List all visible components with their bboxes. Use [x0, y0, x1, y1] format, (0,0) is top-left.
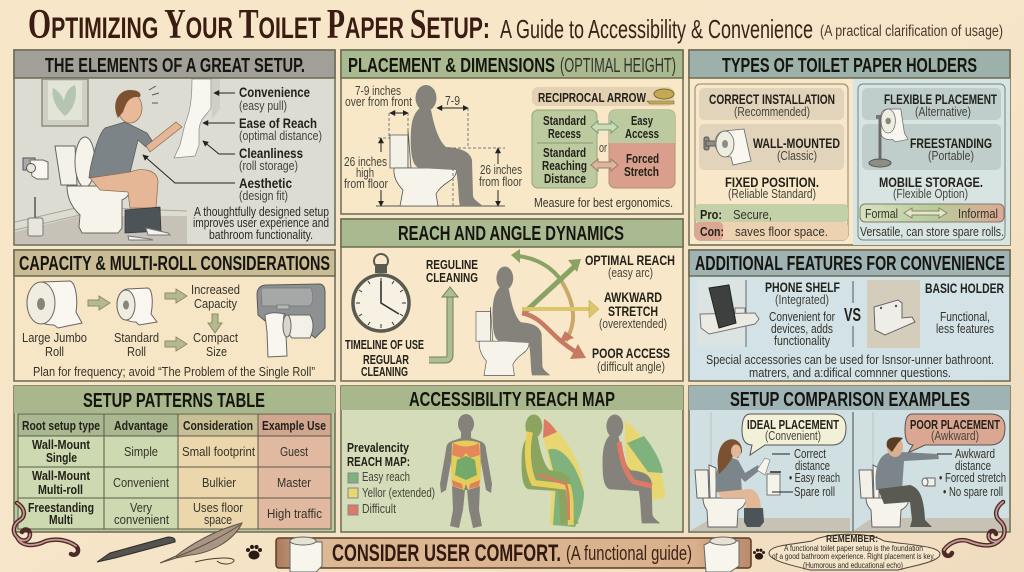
card: freestanding: MOBILE STORAGE. — [879, 174, 983, 190]
example: poor placement: Awkward — [955, 446, 995, 461]
table: Multi — [49, 512, 73, 527]
panel: setup patterns table — [14, 386, 335, 532]
labels: roll types: Capacity — [194, 296, 237, 311]
callout labels: (optimal distance) — [239, 129, 322, 143]
icon: paw right — [753, 549, 765, 560]
icon: stopwatch — [353, 254, 409, 331]
panel: reach and angle dynamics — [341, 219, 683, 381]
callout: remember cloud: REMEMBER: — [826, 533, 878, 545]
table: Wall-Mount — [32, 437, 91, 452]
callout: remember cloud: (Humorous and educational echo) — [803, 560, 903, 570]
figure: side heat map easy reach — [522, 414, 584, 527]
labels: roll types: Size — [206, 344, 227, 359]
text block: summary — [193, 205, 329, 242]
arrow: regular cleaning: REGULINE — [426, 257, 478, 272]
diagram: seated figure with dimensions — [344, 84, 522, 206]
callout labels — [239, 84, 322, 203]
title: A Guide to Accessibility & Convenience — [500, 14, 813, 44]
callout: reciprocal arrow: RECIPROCAL ARROW — [538, 90, 647, 105]
heading: reach: REACH AND ANGLE DYNAMICS — [398, 223, 624, 245]
callout: remember cloud: A functional toilet paper setup is the foundation — [784, 543, 923, 553]
card: wall-mounted: CORRECT INSTALLATION — [709, 91, 835, 107]
callout: reciprocal arrow: Reaching — [542, 158, 587, 173]
heading: capacity: CAPACITY & MULTI-ROLL CONSIDERATIONS — [19, 253, 330, 275]
panel: types of toilet paper holders — [689, 50, 1010, 245]
text block: summary: A thoughtfully designed setup — [194, 205, 329, 219]
card: wall-mounted: (Reliable Standard) — [728, 187, 816, 201]
card: wall-mounted: saves floor space. — [735, 224, 828, 239]
heading: placement: (OPTIMAL HEIGHT) — [560, 55, 676, 77]
icon: paw left — [246, 545, 262, 560]
figure: front heat map — [440, 414, 492, 528]
legend: REACH MAP: — [347, 454, 410, 469]
callout: reciprocal arrow: Forced — [626, 151, 659, 166]
icon: roll right — [704, 537, 739, 572]
legend: Yellor (extended) — [362, 486, 435, 500]
callout labels: Convenience — [239, 84, 310, 100]
table: Example Use — [262, 418, 326, 433]
card: wall-mounted: FIXED POSITION. — [725, 174, 819, 190]
diagram: seated figure with dimensions: 7-9 — [445, 94, 460, 108]
text block: special accessories — [706, 352, 994, 380]
legend — [347, 440, 435, 516]
example: ideal placement: • Easy reach — [789, 470, 840, 485]
example: ideal placement: (Convenient) — [765, 429, 821, 443]
text block: summary: improves user experience and — [193, 216, 329, 230]
labels: roll types: Compact — [193, 330, 238, 345]
table: Simple — [124, 444, 158, 459]
diagram: seated figure with dimensions: 7-9 inches — [355, 84, 401, 98]
panel: the elements of a great setup — [14, 50, 335, 245]
table: Advantage — [114, 418, 168, 433]
card: wall-mounted: Con: — [700, 224, 724, 239]
labels: reach types: POOR ACCESS — [592, 345, 670, 361]
figure: side heat map limited reach — [603, 414, 665, 523]
table: Uses floor — [193, 500, 244, 515]
table: Master — [277, 475, 312, 490]
example: ideal placement: distance — [795, 458, 830, 473]
panel: placement and dimensions — [341, 50, 683, 214]
banner: consider user comfort — [276, 537, 751, 572]
callout: reciprocal arrow: Stretch — [624, 164, 659, 179]
text block: basic holder: less features — [936, 321, 994, 336]
table: Single — [46, 450, 77, 465]
diagram: seated figure with dimensions: 26 inches — [480, 163, 522, 177]
text block: timeline: TIMELINE OF USE — [345, 337, 424, 352]
table: Bulkier — [202, 475, 237, 490]
table: space — [204, 512, 232, 527]
labels: roll types: Increased — [191, 282, 240, 297]
table — [18, 414, 331, 529]
illustration: man on toilet — [15, 79, 220, 244]
card: freestanding: FREESTANDING — [910, 135, 992, 151]
text block: timeline — [345, 337, 424, 379]
text block: phone shelf: (Integrated) — [775, 293, 829, 307]
diagram: seated figure with dimensions: 26 inches — [344, 155, 387, 169]
heading: table: SETUP PATTERNS TABLE — [83, 390, 265, 412]
card: freestanding: (Flexible Option) — [893, 187, 968, 201]
callout labels: Cleanliness — [239, 145, 303, 161]
text block: phone shelf: Convenient for — [769, 309, 836, 324]
title: OPTIMIZING YOUR TOILET PAPER SETUP: — [28, 2, 490, 48]
diagram: seated figure with dimensions: high — [356, 166, 374, 180]
icon: feather quill — [160, 523, 242, 564]
legend: Easy reach — [362, 470, 410, 484]
panel: additional features — [689, 250, 1010, 381]
example: ideal placement — [695, 414, 846, 527]
text block: measure: Measure for best ergonomics. — [534, 195, 673, 210]
text block: timeline: CLEANING — [361, 364, 408, 379]
panel: capacity and multi-roll considerations — [14, 250, 335, 381]
callout: reciprocal arrow: Standard — [543, 113, 586, 128]
example: ideal placement: IDEAL PLACEMENT — [747, 417, 839, 432]
figure: seated person with reach arcs — [476, 249, 599, 375]
arrow: regular cleaning — [426, 257, 478, 360]
icon: roll left — [290, 537, 322, 572]
diagram: seated figure with dimensions: from floor — [479, 175, 522, 189]
card: wall-mounted: WALL-MOUNTED — [753, 135, 840, 151]
labels: reach types: (difficult angle) — [597, 360, 665, 374]
callout: reciprocal arrow: Standard — [543, 145, 586, 160]
text block: special accessories: matrers, and a:difical comnner questions. — [749, 365, 951, 380]
diagram: seated figure with dimensions: from floor — [344, 177, 388, 191]
table: High traffic — [267, 506, 322, 521]
callout labels: Ease of Reach — [239, 115, 317, 131]
labels: reach types: STRETCH — [608, 303, 658, 319]
arrow: regular cleaning: CLEANING — [426, 270, 478, 285]
icon: pen — [97, 537, 175, 562]
panel: accessibility reach map — [341, 386, 683, 532]
text block: timeline: REGULAR — [363, 352, 409, 367]
callout: reciprocal arrow — [532, 87, 675, 188]
table: Root setup type — [22, 418, 100, 433]
divider: versus: VS — [844, 305, 861, 325]
callout labels: (design fit) — [239, 189, 288, 203]
ornament: left corner — [14, 503, 78, 555]
labels: roll types: Roll — [127, 344, 146, 359]
table: Consideration — [183, 418, 253, 433]
card: freestanding — [858, 84, 1005, 240]
text block: summary: bathroom functionality. — [209, 228, 313, 242]
callout: reciprocal arrow: Access — [625, 126, 659, 141]
callout: reciprocal arrow: Easy — [631, 113, 654, 128]
example: poor placement: distance — [955, 458, 991, 473]
labels: reach types: (easy arc) — [608, 266, 653, 280]
icon: double roll dispenser — [257, 284, 325, 357]
labels: reach types: AWKWARD — [604, 289, 662, 305]
card: wall-mounted — [695, 84, 848, 240]
example: ideal placement: Correct — [794, 446, 826, 461]
icon: phone on shelf — [697, 280, 759, 347]
icon: paper strip — [174, 79, 211, 158]
banner: consider user comfort: CONSIDER USER COMFORT. — [332, 540, 561, 567]
card: freestanding: (Alternative) — [915, 105, 971, 119]
callout: reciprocal arrow: Recess — [548, 126, 581, 141]
table: Guest — [280, 444, 308, 459]
ornament: right corner — [944, 502, 1004, 556]
card: wall-mounted: (Classic) — [777, 149, 817, 163]
text block: phone shelf — [765, 279, 840, 348]
text block: phone shelf: PHONE SHELF — [765, 279, 840, 295]
legend: Prevalencity — [347, 440, 410, 455]
labels: roll types: Large Jumbo — [22, 330, 87, 345]
callout: remember cloud: of a good bathroom experience. Right placement is key. — [772, 551, 935, 561]
text block: basic holder: Functional, — [940, 309, 990, 324]
table: Multi-roll — [38, 482, 83, 497]
text block: basic holder — [925, 280, 1004, 336]
callout labels: (roll storage) — [239, 159, 298, 173]
card: freestanding: (Portable) — [928, 149, 974, 163]
callout: remember cloud — [769, 533, 940, 570]
text block: plan: Plan for frequency; avoid “The Problem of the Single Roll” — [33, 364, 315, 379]
example: poor placement: • No spare roll — [943, 484, 1003, 499]
text block: phone shelf: devices, adds — [771, 321, 833, 336]
table: convenient — [114, 512, 169, 527]
icon: basic holder — [867, 280, 920, 348]
labels: roll types: Roll — [45, 344, 64, 359]
callout labels: (easy pull) — [239, 99, 287, 113]
heading: placement: PLACEMENT & DIMENSIONS — [348, 55, 555, 77]
text block: phone shelf: functionality — [774, 333, 830, 348]
callout: reciprocal arrow: or — [599, 141, 607, 155]
example: poor placement: (Awkward) — [931, 429, 979, 443]
divider: versus — [844, 281, 861, 347]
legend: Difficult — [362, 502, 396, 516]
table: Freestanding — [28, 500, 94, 515]
card: freestanding: Informal — [958, 206, 998, 221]
example: poor placement — [859, 414, 1006, 527]
card: wall-mounted: Secure, — [733, 207, 772, 222]
leader arrows — [143, 93, 235, 183]
heading: elements: THE ELEMENTS OF A GREAT SETUP. — [45, 55, 305, 77]
labels: reach types: OPTIMAL REACH — [585, 252, 675, 268]
callout: reciprocal arrow: Distance — [544, 171, 586, 186]
icons: rolls and flow arrows — [27, 281, 222, 351]
card: wall-mounted: Pro: — [700, 207, 722, 222]
table: Small footprint — [182, 444, 255, 459]
card: wall-mounted: (Recommended) — [734, 105, 810, 119]
table: Wall-Mount — [32, 468, 91, 483]
labels: reach types — [585, 252, 675, 374]
callout labels: Aesthetic — [239, 175, 292, 191]
heading: reach map: ACCESSIBILITY REACH MAP — [409, 389, 615, 411]
banner: consider user comfort: (A functional guide) — [566, 543, 692, 565]
diagram: seated figure with dimensions: over from front — [345, 95, 412, 109]
table: Very — [130, 500, 152, 515]
labels: reach types: (overextended) — [599, 317, 667, 331]
table: Convenient — [113, 475, 169, 490]
labels: roll types — [22, 282, 240, 359]
panel: setup comparison examples — [689, 386, 1010, 532]
title — [28, 2, 1003, 48]
card: freestanding: Formal — [865, 206, 898, 221]
example: ideal placement: Spare roll — [794, 484, 835, 499]
labels: roll types: Standard — [114, 330, 159, 345]
